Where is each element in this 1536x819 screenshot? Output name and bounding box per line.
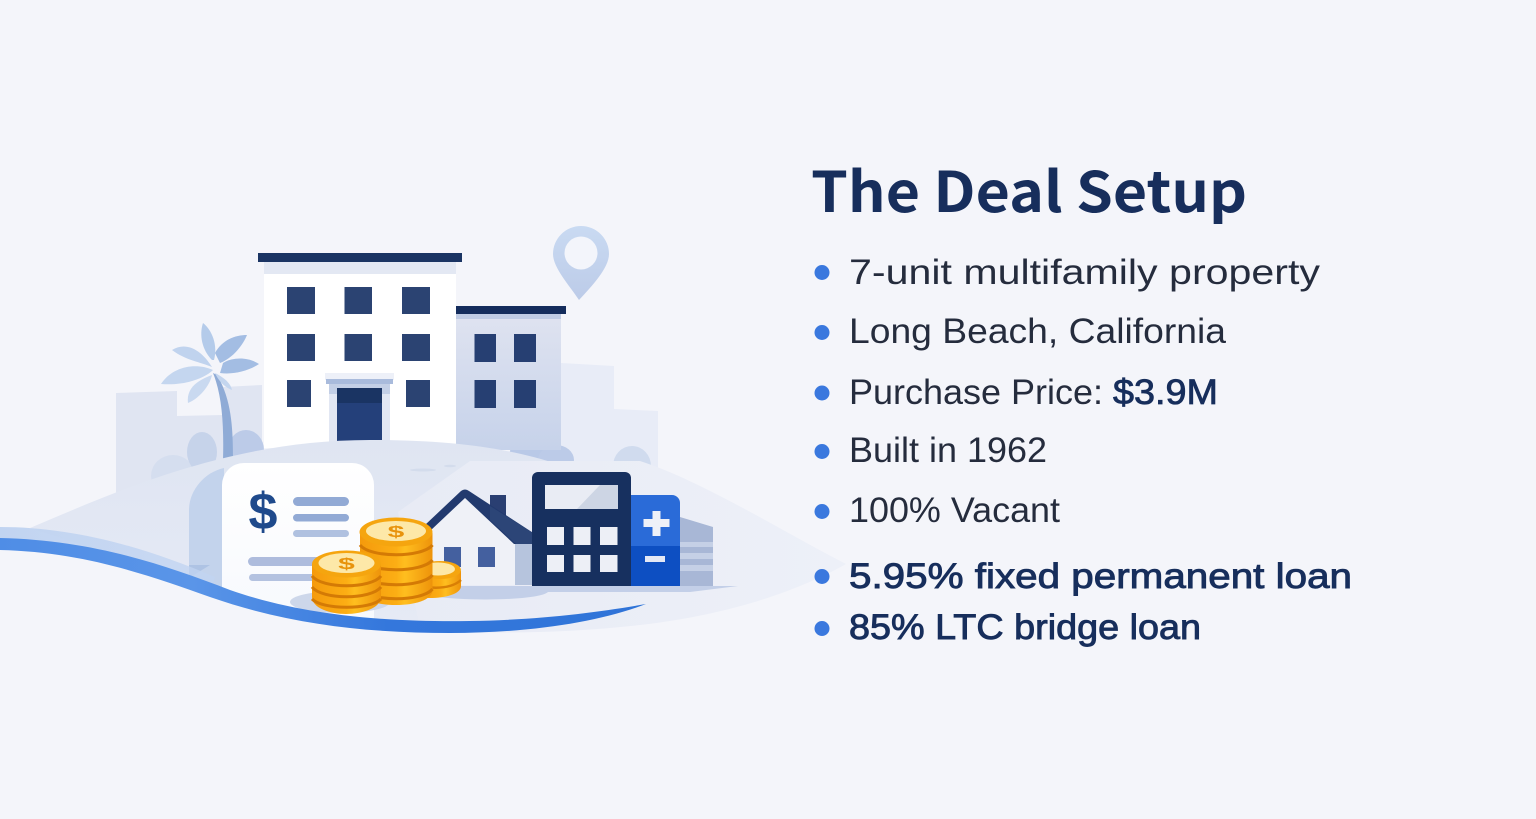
ground shadow (430, 586, 738, 599)
calculator side panel (631, 495, 680, 586)
coins: small back stack (419, 561, 461, 598)
hill: right ground (398, 461, 846, 633)
hill details (410, 465, 456, 472)
ground below swoosh (0, 548, 500, 819)
coins: tall stack: $ (388, 523, 405, 541)
icon: location pin (553, 226, 609, 300)
side building stripes (680, 517, 713, 586)
apartment side wing (456, 306, 566, 450)
calculator (532, 472, 631, 586)
hill: left ground (30, 440, 620, 632)
entrance door (325, 373, 394, 442)
bullet: permanent loan: 5.95% fixed permanent loan (849, 557, 1352, 596)
coins: tall stack (360, 518, 432, 605)
apartment main building (258, 253, 462, 448)
bullet: purchase price: $3.9M (1113, 373, 1218, 412)
bullet: year built: Built in 1962 (849, 431, 1047, 470)
swoosh: light band (0, 527, 215, 588)
document card (222, 463, 374, 620)
coin shadow (290, 591, 390, 613)
bushes behind the hill (151, 430, 651, 497)
skyline: left background buildings (116, 385, 262, 500)
house (425, 490, 543, 585)
bullet: vacancy: 100% Vacant (849, 491, 1060, 530)
coins: front stack (312, 550, 381, 614)
title: The Deal Setup (811, 148, 1247, 229)
document text lines (248, 497, 349, 581)
dollar sign: $ (249, 483, 278, 541)
icon: palm tree (161, 323, 259, 460)
swoosh: blue curve (0, 538, 646, 633)
document shadow (189, 468, 224, 600)
skyline: right background buildings (561, 363, 658, 480)
bullet: purchase price: Purchase Price: (849, 373, 1103, 412)
coins: front stack: $ (338, 555, 356, 573)
illustration: property and financing scene (0, 226, 846, 819)
bullet: location: Long Beach, California (849, 312, 1227, 351)
bullet: purchase price (814, 373, 1218, 412)
bullet: unit count: 7-unit multifamily property (849, 253, 1321, 292)
bullet: bridge loan: 85% LTC bridge loan (849, 608, 1201, 647)
document fold detail (189, 565, 210, 578)
